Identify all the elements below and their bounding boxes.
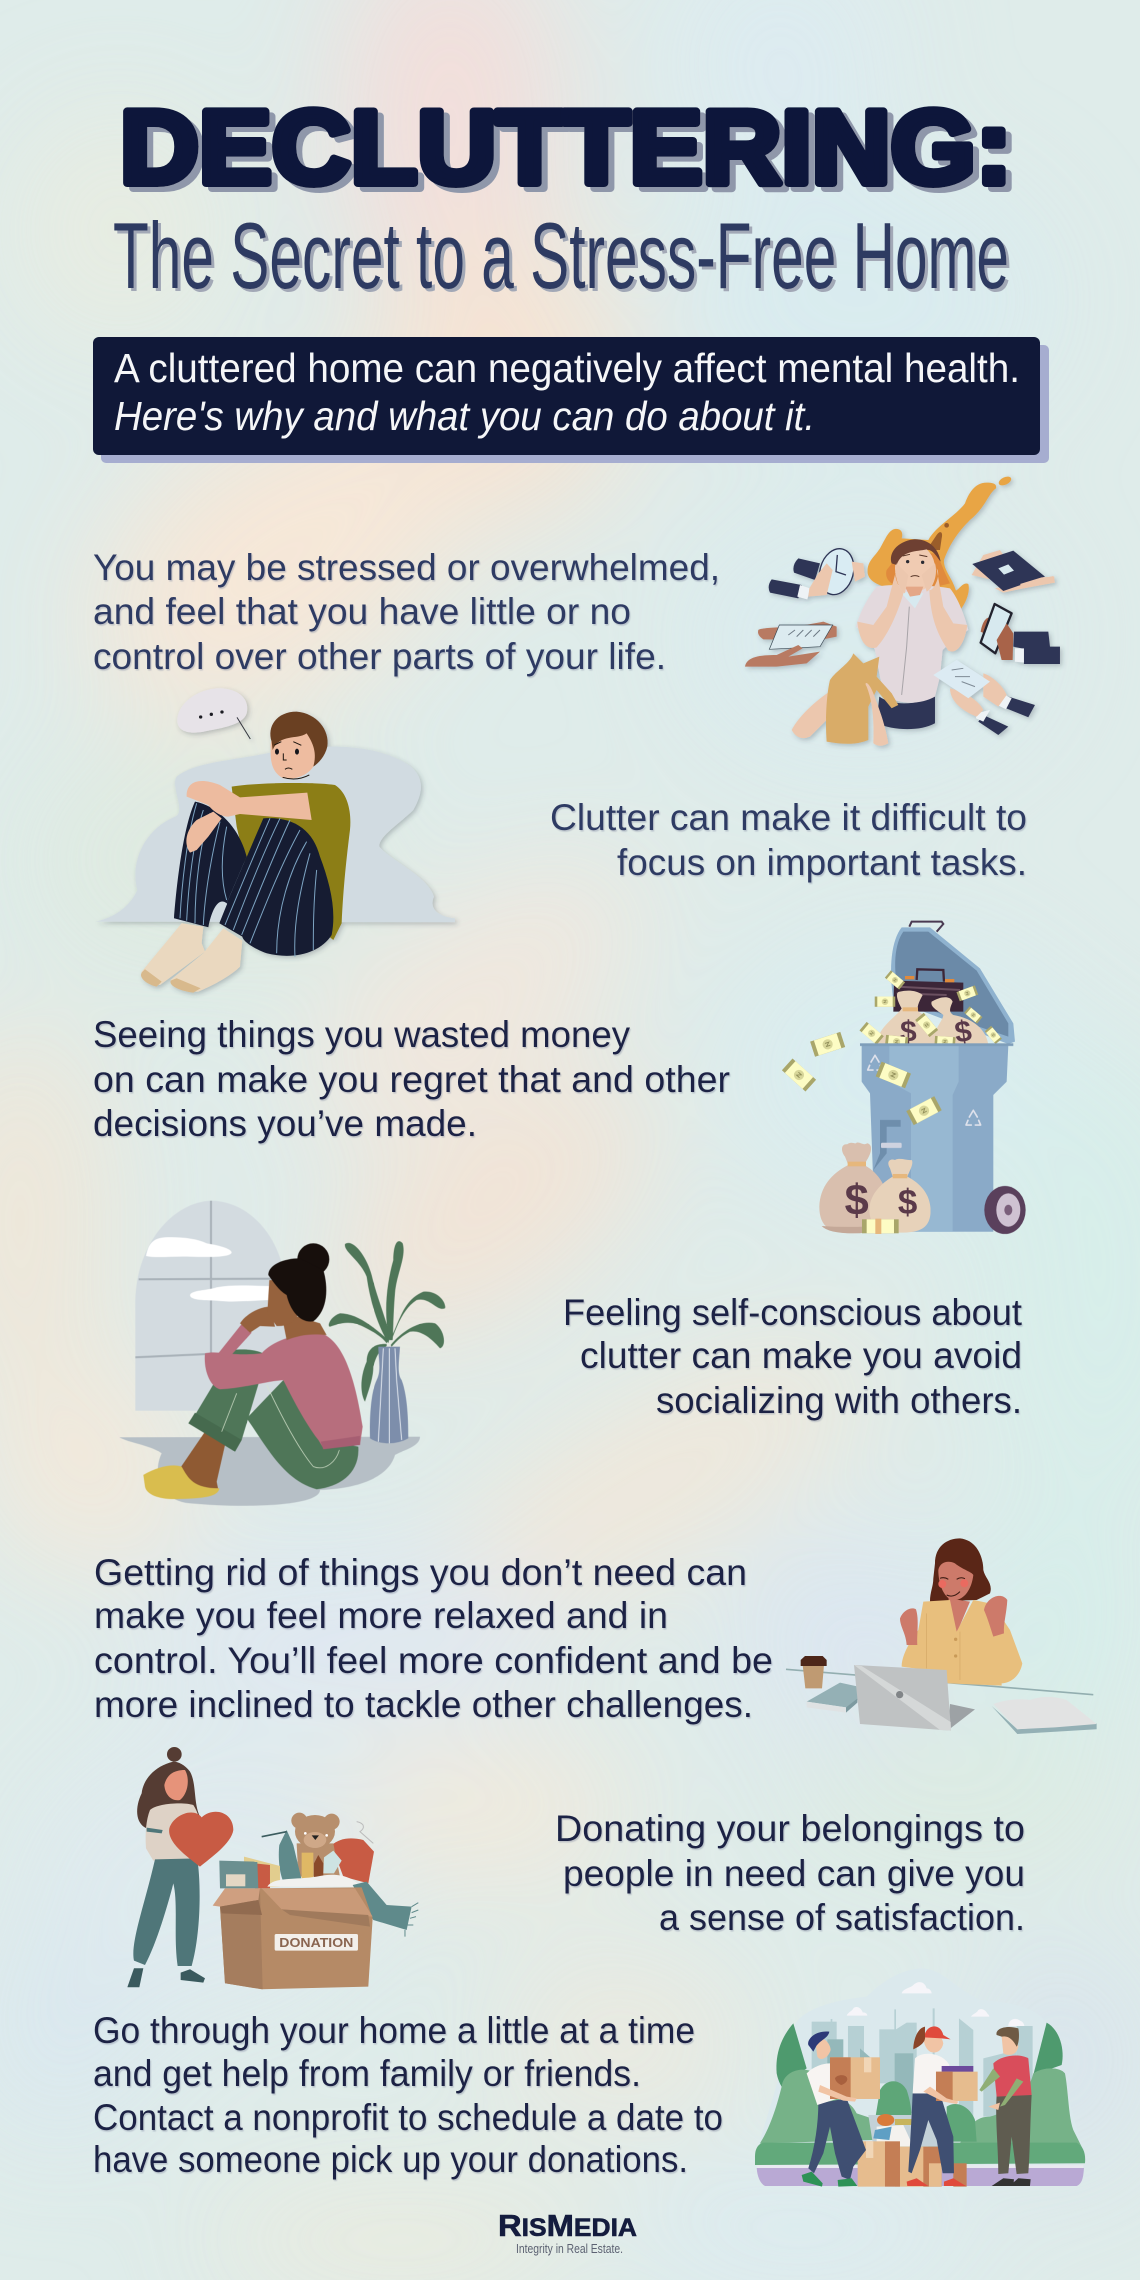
text block: donating: [555, 1808, 1025, 1938]
person: [856, 539, 968, 729]
text block: stress: control over other parts of your life.: [93, 636, 666, 677]
donation label: [275, 1934, 358, 1951]
text block: donating: people in need can give you: [563, 1853, 1025, 1894]
speech bubble: [177, 688, 250, 739]
illustration: volunteers moving donation boxes: [755, 1968, 1085, 2187]
text block: how to start: have someone pick up your donations.: [93, 2139, 688, 2180]
money bags: [819, 1142, 931, 1234]
volunteer left: [802, 2031, 880, 2187]
tagline: Integrity in Real Estate.: [516, 2241, 623, 2256]
wordmark: RISMEDIA: [498, 2208, 637, 2243]
text block: stress: [93, 547, 720, 677]
woman: [900, 1538, 1022, 1686]
donation box: [213, 1887, 373, 1989]
text block: wasted money: Seeing things you wasted money: [93, 1014, 630, 1055]
text block: stress: and feel that you have little or no: [93, 591, 631, 632]
text block: how to start: Contact a nonprofit to schedule a date to: [93, 2097, 723, 2138]
text block: focus: Clutter can make it difficult to: [550, 797, 1027, 838]
text block: focus: [550, 797, 1027, 883]
paper and hands: [933, 660, 1035, 735]
open donation box: [868, 2114, 938, 2147]
text block: self-conscious: clutter can make you avoid: [580, 1335, 1022, 1376]
text block: wasted money: [93, 1014, 730, 1144]
window: [135, 1201, 297, 1411]
plant and vase: [329, 1241, 445, 1443]
illustration: happy woman at desk: [786, 1538, 1097, 1734]
intro banner: [93, 337, 1049, 463]
heading: Decluttering: DECLUTTERING:: [120, 90, 1012, 206]
text block: focus: focus on important tasks.: [617, 842, 1027, 883]
text block: self-conscious: [563, 1292, 1023, 1421]
skyline: [812, 2008, 1033, 2117]
loot: $: [953, 1015, 974, 1050]
pavement: [757, 2165, 1084, 2186]
banner text line 2: Here's why and what you can do about it.: [114, 393, 815, 439]
title: [113, 90, 1012, 308]
trees and bushes: [755, 2023, 1085, 2165]
text block: relaxed and confident: [94, 1552, 773, 1725]
clouds: [847, 1982, 1024, 2026]
text block: donating: a sense of satisfaction.: [659, 1897, 1025, 1938]
volunteer middle: [907, 2026, 978, 2186]
banner text line 1: A cluttered home can negatively affect mental health.: [114, 345, 1020, 391]
text block: relaxed and confident: Getting rid of things you don’t need can: [94, 1552, 747, 1593]
flying bills: [782, 1032, 942, 1125]
text block: relaxed and confident: more inclined to tackle other challenges.: [94, 1684, 753, 1725]
text block: how to start: [93, 2010, 723, 2180]
scarf: [353, 1882, 412, 1930]
blob shape: [95, 746, 455, 922]
illustration: overwhelmed person with reaching hands: [745, 475, 1060, 746]
text block: relaxed and confident: make you feel more relaxed and in: [94, 1595, 668, 1636]
text block: donating: Donating your belongings to: [555, 1808, 1025, 1849]
illustration: woman looking out of window: [119, 1201, 445, 1506]
bin lid: [891, 922, 1015, 1044]
volunteer right: [979, 2027, 1032, 2186]
text block: relaxed and confident: control. You’ll feel more confident and be: [94, 1640, 773, 1681]
text block: self-conscious: Feeling self-conscious about: [563, 1292, 1023, 1333]
book: [807, 1683, 858, 1707]
illustration: woman with heart and donation box: [127, 1747, 418, 1989]
phone and hands: [981, 604, 1060, 664]
stacked boxes: [858, 2141, 967, 2187]
notebook: [992, 1697, 1097, 1734]
donation label: DONATION: [279, 1936, 353, 1950]
sky blob: [755, 1968, 1085, 2157]
box contents: [219, 1813, 374, 1888]
text block: how to start: Go through your home a little at a time: [93, 2010, 695, 2051]
text block: stress: You may be stressed or overwhelmed,: [93, 547, 720, 588]
laptop: [854, 1665, 975, 1731]
bin body: [860, 1043, 1013, 1232]
wheel: [984, 1186, 1026, 1234]
man: [141, 712, 350, 993]
loot: [859, 969, 1002, 1050]
coffee cup: [801, 1656, 827, 1688]
text block: how to start: and get help from family or friends.: [93, 2053, 641, 2094]
illustration: trash bin full of money: [782, 922, 1026, 1234]
loot: $: [900, 1016, 917, 1049]
tablet and hands: [972, 550, 1055, 593]
woman: [127, 1747, 233, 1987]
text block: wasted money: decisions you’ve made.: [93, 1103, 477, 1144]
floor shadow: [119, 1437, 420, 1506]
book and hands: [745, 622, 837, 667]
clock and hands: [769, 545, 865, 599]
text block: self-conscious: socializing with others.: [656, 1380, 1022, 1421]
logo: [498, 2208, 637, 2256]
text block: wasted money: on can make you regret that and other: [93, 1059, 730, 1100]
illustration: sad man sitting: [95, 688, 455, 993]
desk line: [786, 1669, 1093, 1695]
money bags: $: [898, 1183, 917, 1222]
woman: [143, 1243, 363, 1499]
cat and arms: [792, 653, 898, 746]
money bags: $: [845, 1177, 869, 1225]
